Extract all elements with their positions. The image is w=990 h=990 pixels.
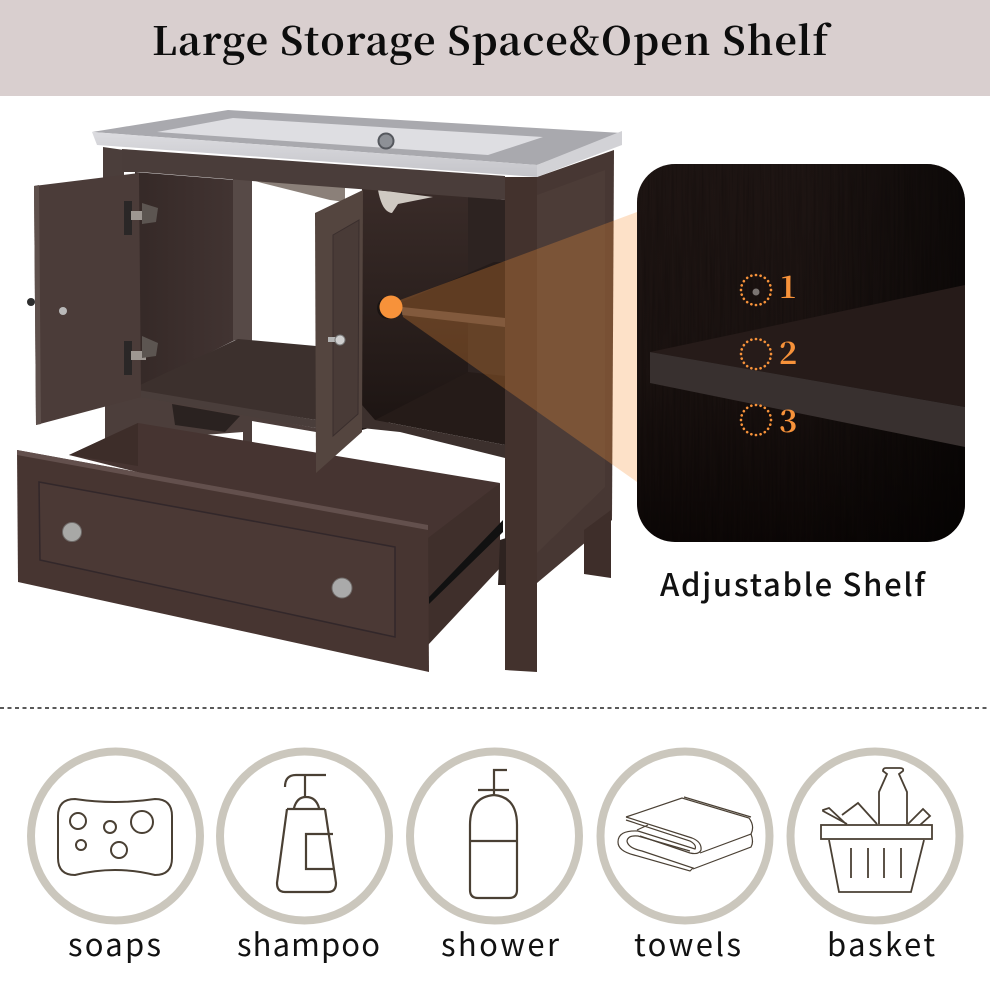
countertop <box>92 110 622 177</box>
icon: shampoo bottle <box>277 775 336 892</box>
marker 2: 2 <box>779 328 797 373</box>
item: shampoo <box>220 752 389 965</box>
callout anchor dot <box>377 296 402 319</box>
left door <box>27 173 141 425</box>
label: soaps <box>68 920 161 965</box>
front right leg <box>505 177 537 672</box>
marker 3 <box>741 396 797 441</box>
adjustable shelf <box>402 262 506 327</box>
icon: folded towels <box>618 797 753 871</box>
marker 3: 3 <box>779 396 797 441</box>
left shelf <box>138 339 316 428</box>
item: towels <box>600 752 770 965</box>
title banner <box>0 0 990 96</box>
marker 1: 1 <box>779 262 797 307</box>
door knob <box>328 335 345 345</box>
label: shower <box>441 920 560 965</box>
caption: adjustable shelf: Adjustable Shelf <box>660 560 926 605</box>
title: Large Storage Space&Open Shelf <box>152 11 832 67</box>
upper hinge <box>124 201 158 235</box>
open drawer <box>17 423 506 672</box>
center post <box>233 178 252 342</box>
label: basket <box>827 920 935 965</box>
item: soaps <box>31 752 200 965</box>
drawer knob right <box>332 578 352 598</box>
drain <box>378 134 394 148</box>
drawer front <box>17 450 429 672</box>
item: basket <box>790 752 960 965</box>
right door <box>315 190 363 473</box>
sink bowl underside <box>378 190 433 213</box>
marker 2 <box>741 328 797 373</box>
item: shower <box>410 752 579 965</box>
panel: shelf close-up <box>637 164 965 542</box>
right compartment <box>362 186 505 458</box>
drawer interior <box>69 423 500 545</box>
sink underside <box>252 180 345 202</box>
left compartment back wall <box>135 172 235 390</box>
drawer inset panel <box>39 482 395 637</box>
icon: soap <box>58 799 172 875</box>
shelf top <box>650 285 965 407</box>
rail under counter <box>122 149 505 200</box>
vanity cabinet photo <box>17 110 622 672</box>
orange callout cone <box>400 212 637 482</box>
icon: basket <box>821 768 932 892</box>
drawer side <box>428 483 500 645</box>
right side panel <box>537 150 614 583</box>
marker 1 <box>741 262 797 307</box>
back left post <box>103 147 124 200</box>
drawer knob left <box>62 522 82 542</box>
knob and screw <box>27 298 35 306</box>
lower hinge <box>124 336 158 375</box>
label: shampoo <box>237 920 380 965</box>
shelf front edge <box>650 352 965 447</box>
shelf hole <box>752 288 760 296</box>
label: towels <box>634 920 741 965</box>
lower left rail and legs <box>105 397 316 445</box>
drawer slide <box>429 520 503 604</box>
icon: shower gel bottle <box>470 770 517 898</box>
